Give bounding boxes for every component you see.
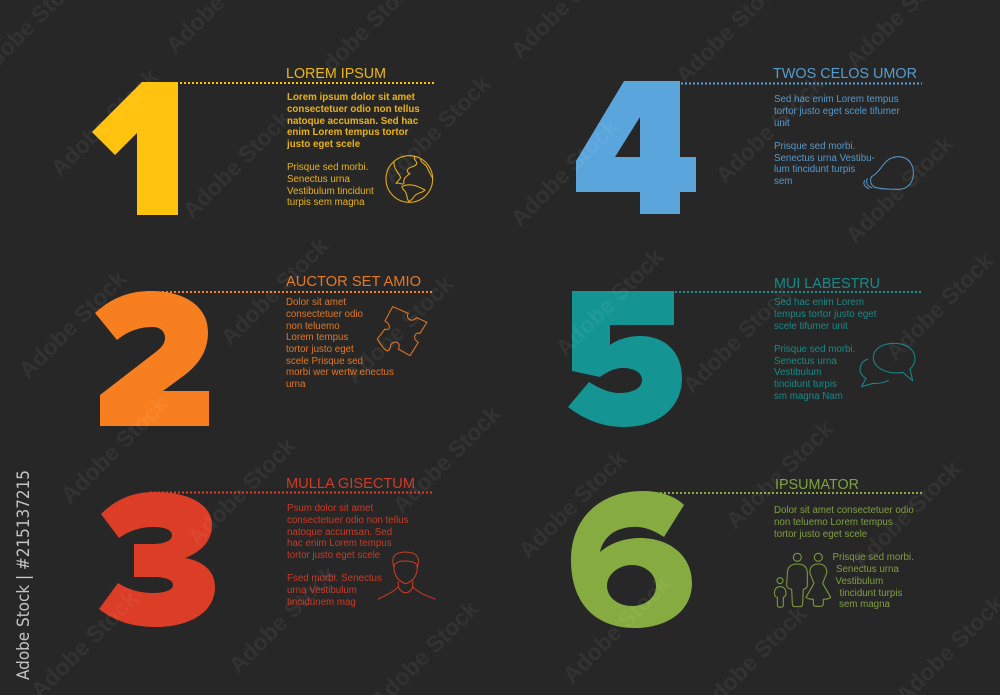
text block: urna Vestibulum bbox=[287, 585, 357, 596]
panel: step 3 bbox=[99, 476, 435, 627]
text block: lum tincidunt turpis bbox=[774, 164, 855, 175]
text block: hac enim Lorem tempus bbox=[287, 538, 392, 549]
watermark pattern: Adobe Stock bbox=[13, 265, 131, 383]
watermark pattern: Adobe Stock bbox=[677, 280, 795, 398]
icon: puzzle piece bbox=[377, 307, 427, 356]
heading: ipsumator: IPSUMATOR bbox=[775, 477, 859, 493]
text block: unit bbox=[774, 118, 790, 129]
text block: Prisque sed morbi. bbox=[774, 344, 855, 355]
icon: person bbox=[378, 552, 435, 599]
watermark pattern: Adobe Stock bbox=[557, 570, 675, 688]
watermark pattern: Adobe Stock bbox=[840, 130, 958, 248]
text block bbox=[774, 344, 855, 402]
text block: Fsed morbi. Senectus bbox=[287, 573, 382, 584]
text block: scele Prisque sed bbox=[286, 356, 363, 367]
bold text block bbox=[286, 92, 420, 150]
panel: step 1 bbox=[92, 66, 434, 215]
text block: Dolor sit amet consectetuer odio bbox=[774, 505, 914, 516]
text block: Vestibulum bbox=[774, 367, 822, 378]
number 2 bbox=[95, 291, 209, 426]
text block: tincidunt turpis bbox=[774, 379, 837, 390]
icon: family bbox=[774, 553, 831, 607]
panel: step 2 bbox=[95, 274, 434, 426]
bold text block: natoque accumsan. Sed hac bbox=[287, 116, 419, 127]
text block bbox=[774, 141, 875, 187]
watermark pattern: Adobe Stock bbox=[177, 105, 295, 223]
text block: Lorem tempus bbox=[286, 332, 348, 343]
stock id vertical text: Adobe Stock | #215137215 bbox=[14, 470, 34, 680]
text block: scele tifumer unit bbox=[774, 321, 848, 332]
text block bbox=[832, 552, 914, 610]
text block: tincidunem mag bbox=[287, 597, 356, 608]
watermark pattern: Adobe Stock bbox=[55, 390, 173, 508]
text block: tortor justo eget scele bbox=[774, 529, 867, 540]
text block: tempus tortor justo eget bbox=[774, 309, 877, 320]
bold text block: Lorem ipsum dolor sit amet bbox=[287, 92, 416, 103]
icon: speech bubbles bbox=[860, 343, 915, 387]
text block: tincidunt turpis bbox=[840, 588, 902, 599]
watermark pattern: Adobe Stock bbox=[513, 445, 631, 563]
watermark pattern: Adobe Stock bbox=[340, 270, 458, 388]
number 3 bbox=[99, 492, 215, 627]
text block bbox=[287, 503, 409, 561]
bold text block: justo eget scele bbox=[286, 139, 361, 150]
panel: step 6 bbox=[571, 477, 924, 628]
text block: tortor justo eget scele tifumer bbox=[774, 106, 900, 117]
text block: Prisque sed morbi. bbox=[287, 162, 368, 173]
text block: Senectus urna Vestibu- bbox=[774, 153, 875, 164]
panel: step 5 bbox=[568, 276, 922, 427]
heading: auctor set amio: AUCTOR SET AMIO bbox=[286, 274, 421, 290]
text block bbox=[287, 573, 382, 608]
heading: twos celos umor: TWOS CELOS UMOR bbox=[773, 66, 917, 82]
watermark pattern: Adobe Stock bbox=[550, 243, 668, 361]
panel: step 4 bbox=[576, 66, 922, 214]
text block: tortor justo eget bbox=[286, 344, 354, 355]
watermark pattern: Adobe Stock bbox=[847, 455, 965, 573]
bold text block: consectetuer odio non tellus bbox=[287, 104, 420, 115]
text block: Psum dolor sit amet bbox=[287, 503, 373, 514]
watermark pattern: Adobe Stock bbox=[880, 247, 998, 365]
text block: sem bbox=[774, 176, 792, 187]
text block: Senectus urna bbox=[287, 174, 350, 185]
number 1 bbox=[92, 82, 178, 215]
text block bbox=[774, 505, 914, 540]
text block bbox=[774, 297, 877, 332]
number 5 bbox=[568, 291, 682, 427]
heading: mulla gisectum: MULLA GISECTUM bbox=[286, 476, 415, 492]
text block: morbi wer wertw enectus bbox=[286, 367, 394, 378]
text block: Sed hac enim Lorem bbox=[774, 297, 864, 308]
watermark pattern: Adobe Stock bbox=[387, 400, 505, 518]
text block: Senectus urna bbox=[836, 564, 899, 575]
watermark pattern: Adobe Stock bbox=[45, 63, 163, 181]
text block: Senectus urna bbox=[774, 356, 837, 367]
text block bbox=[287, 162, 374, 208]
watermark pattern: Adobe Stock bbox=[720, 415, 838, 533]
watermark pattern: Adobe Stock bbox=[505, 113, 623, 231]
text block: Vestibulum bbox=[836, 576, 883, 587]
text block: consectetuer odio bbox=[286, 309, 364, 320]
text block: sem magna bbox=[839, 599, 891, 610]
text block: Prisque sed morbi. bbox=[774, 141, 855, 152]
heading: lorem ipsum: LOREM IPSUM bbox=[286, 66, 386, 82]
watermark pattern: Adobe Stock bbox=[223, 560, 341, 678]
text block: sm magna Nam bbox=[774, 391, 843, 402]
text block: urna bbox=[286, 379, 306, 390]
text block bbox=[774, 94, 900, 129]
watermark pattern: Adobe Stock bbox=[710, 70, 828, 188]
icon: light bulb bbox=[864, 157, 913, 189]
text block: Prisque sed morbi. bbox=[832, 552, 914, 563]
text block: non teluemo bbox=[286, 321, 340, 332]
watermark pattern: Adobe Stock bbox=[182, 432, 300, 550]
bold text block: enim Lorem tempus tortor bbox=[287, 127, 409, 138]
watermark pattern: Adobe Stock bbox=[215, 232, 333, 350]
text block: Vestibulum tincidunt bbox=[287, 186, 374, 197]
text block: tortor justo eget scele bbox=[287, 550, 380, 561]
text block: natoque accumsan. Sed bbox=[287, 527, 392, 538]
text block: consectetuer odio non tellus bbox=[287, 515, 409, 526]
text block: Dolor sit amet bbox=[286, 297, 346, 308]
number 6 bbox=[571, 491, 692, 628]
number 4 bbox=[576, 81, 696, 214]
text block: turpis sem magna bbox=[287, 197, 365, 208]
text block: Sed hac enim Lorem tempus bbox=[774, 94, 899, 105]
heading: mui labestru: MUI LABESTRU bbox=[774, 276, 880, 292]
text block: non teluemo Lorem tempus bbox=[774, 517, 893, 528]
text block bbox=[286, 297, 394, 390]
icon: globe bbox=[386, 156, 433, 202]
watermark pattern: Adobe Stock bbox=[377, 70, 495, 188]
